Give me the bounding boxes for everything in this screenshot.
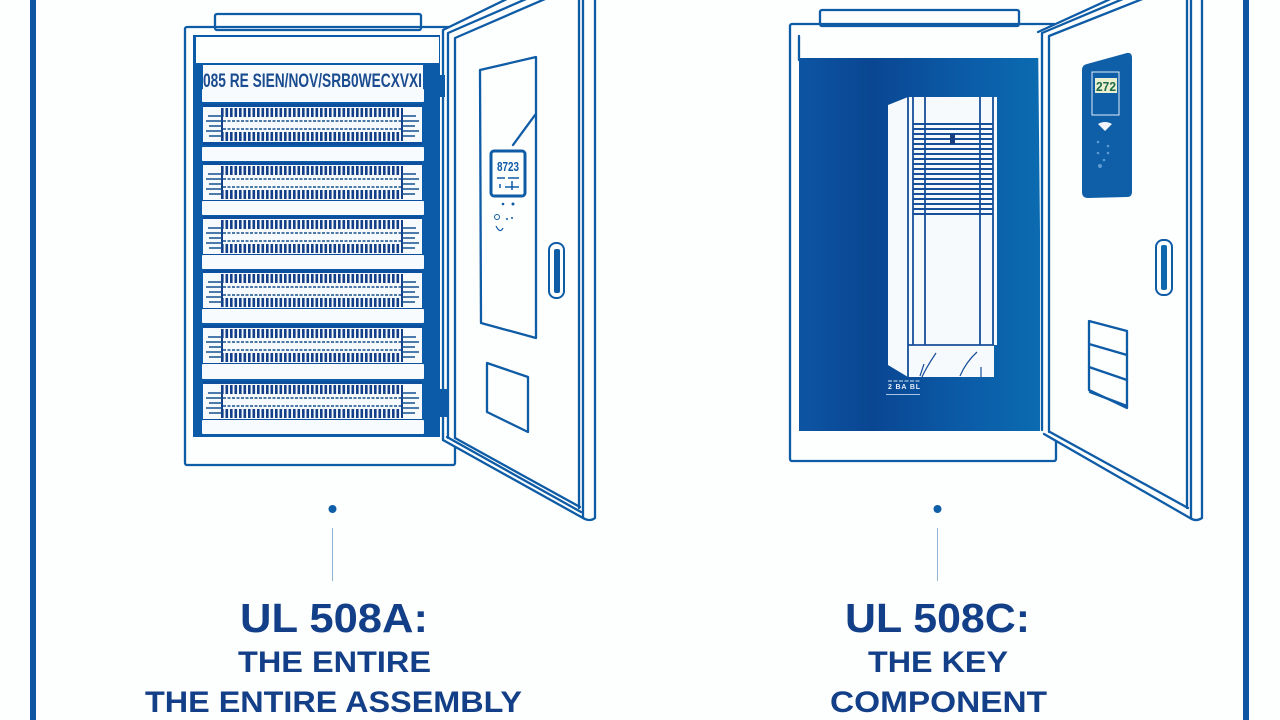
heading: UL 508C: UL 508C: [845, 595, 1030, 641]
central drive unit: 2 BA BL [888, 384, 921, 391]
vent plate [487, 363, 528, 432]
panel: UL 508C enclosure illustration [790, 0, 1203, 520]
panel: UL 508A enclosure illustration [185, 0, 595, 520]
open door [438, 0, 595, 520]
control panel: 272 [1096, 79, 1116, 94]
cabinet body [790, 10, 1056, 461]
display [491, 151, 525, 231]
display: 8723 [497, 159, 519, 174]
subheading: the entire: THE ENTIRE [238, 646, 431, 679]
handle [1156, 240, 1172, 295]
subheading: the entire assembly: THE ENTIRE ASSEMBLY [145, 686, 522, 719]
terminal rows: 085 RE SIEN/NOV/SRB0WECXVXI [203, 71, 422, 92]
handle [549, 243, 564, 298]
central drive unit [886, 97, 997, 395]
subheading: the key: THE KEY [868, 646, 1008, 679]
open door [1038, 0, 1203, 520]
vent plate [1089, 321, 1127, 408]
subheading: component: COMPONENT [830, 686, 1047, 719]
cabinet body [185, 14, 455, 465]
door window [480, 57, 536, 338]
heading: UL 508A: UL 508A: [240, 595, 428, 641]
connector: UL 508A [328, 505, 336, 581]
terminal rows [202, 65, 424, 434]
control panel [1082, 53, 1132, 198]
connector: UL 508C [934, 505, 942, 581]
